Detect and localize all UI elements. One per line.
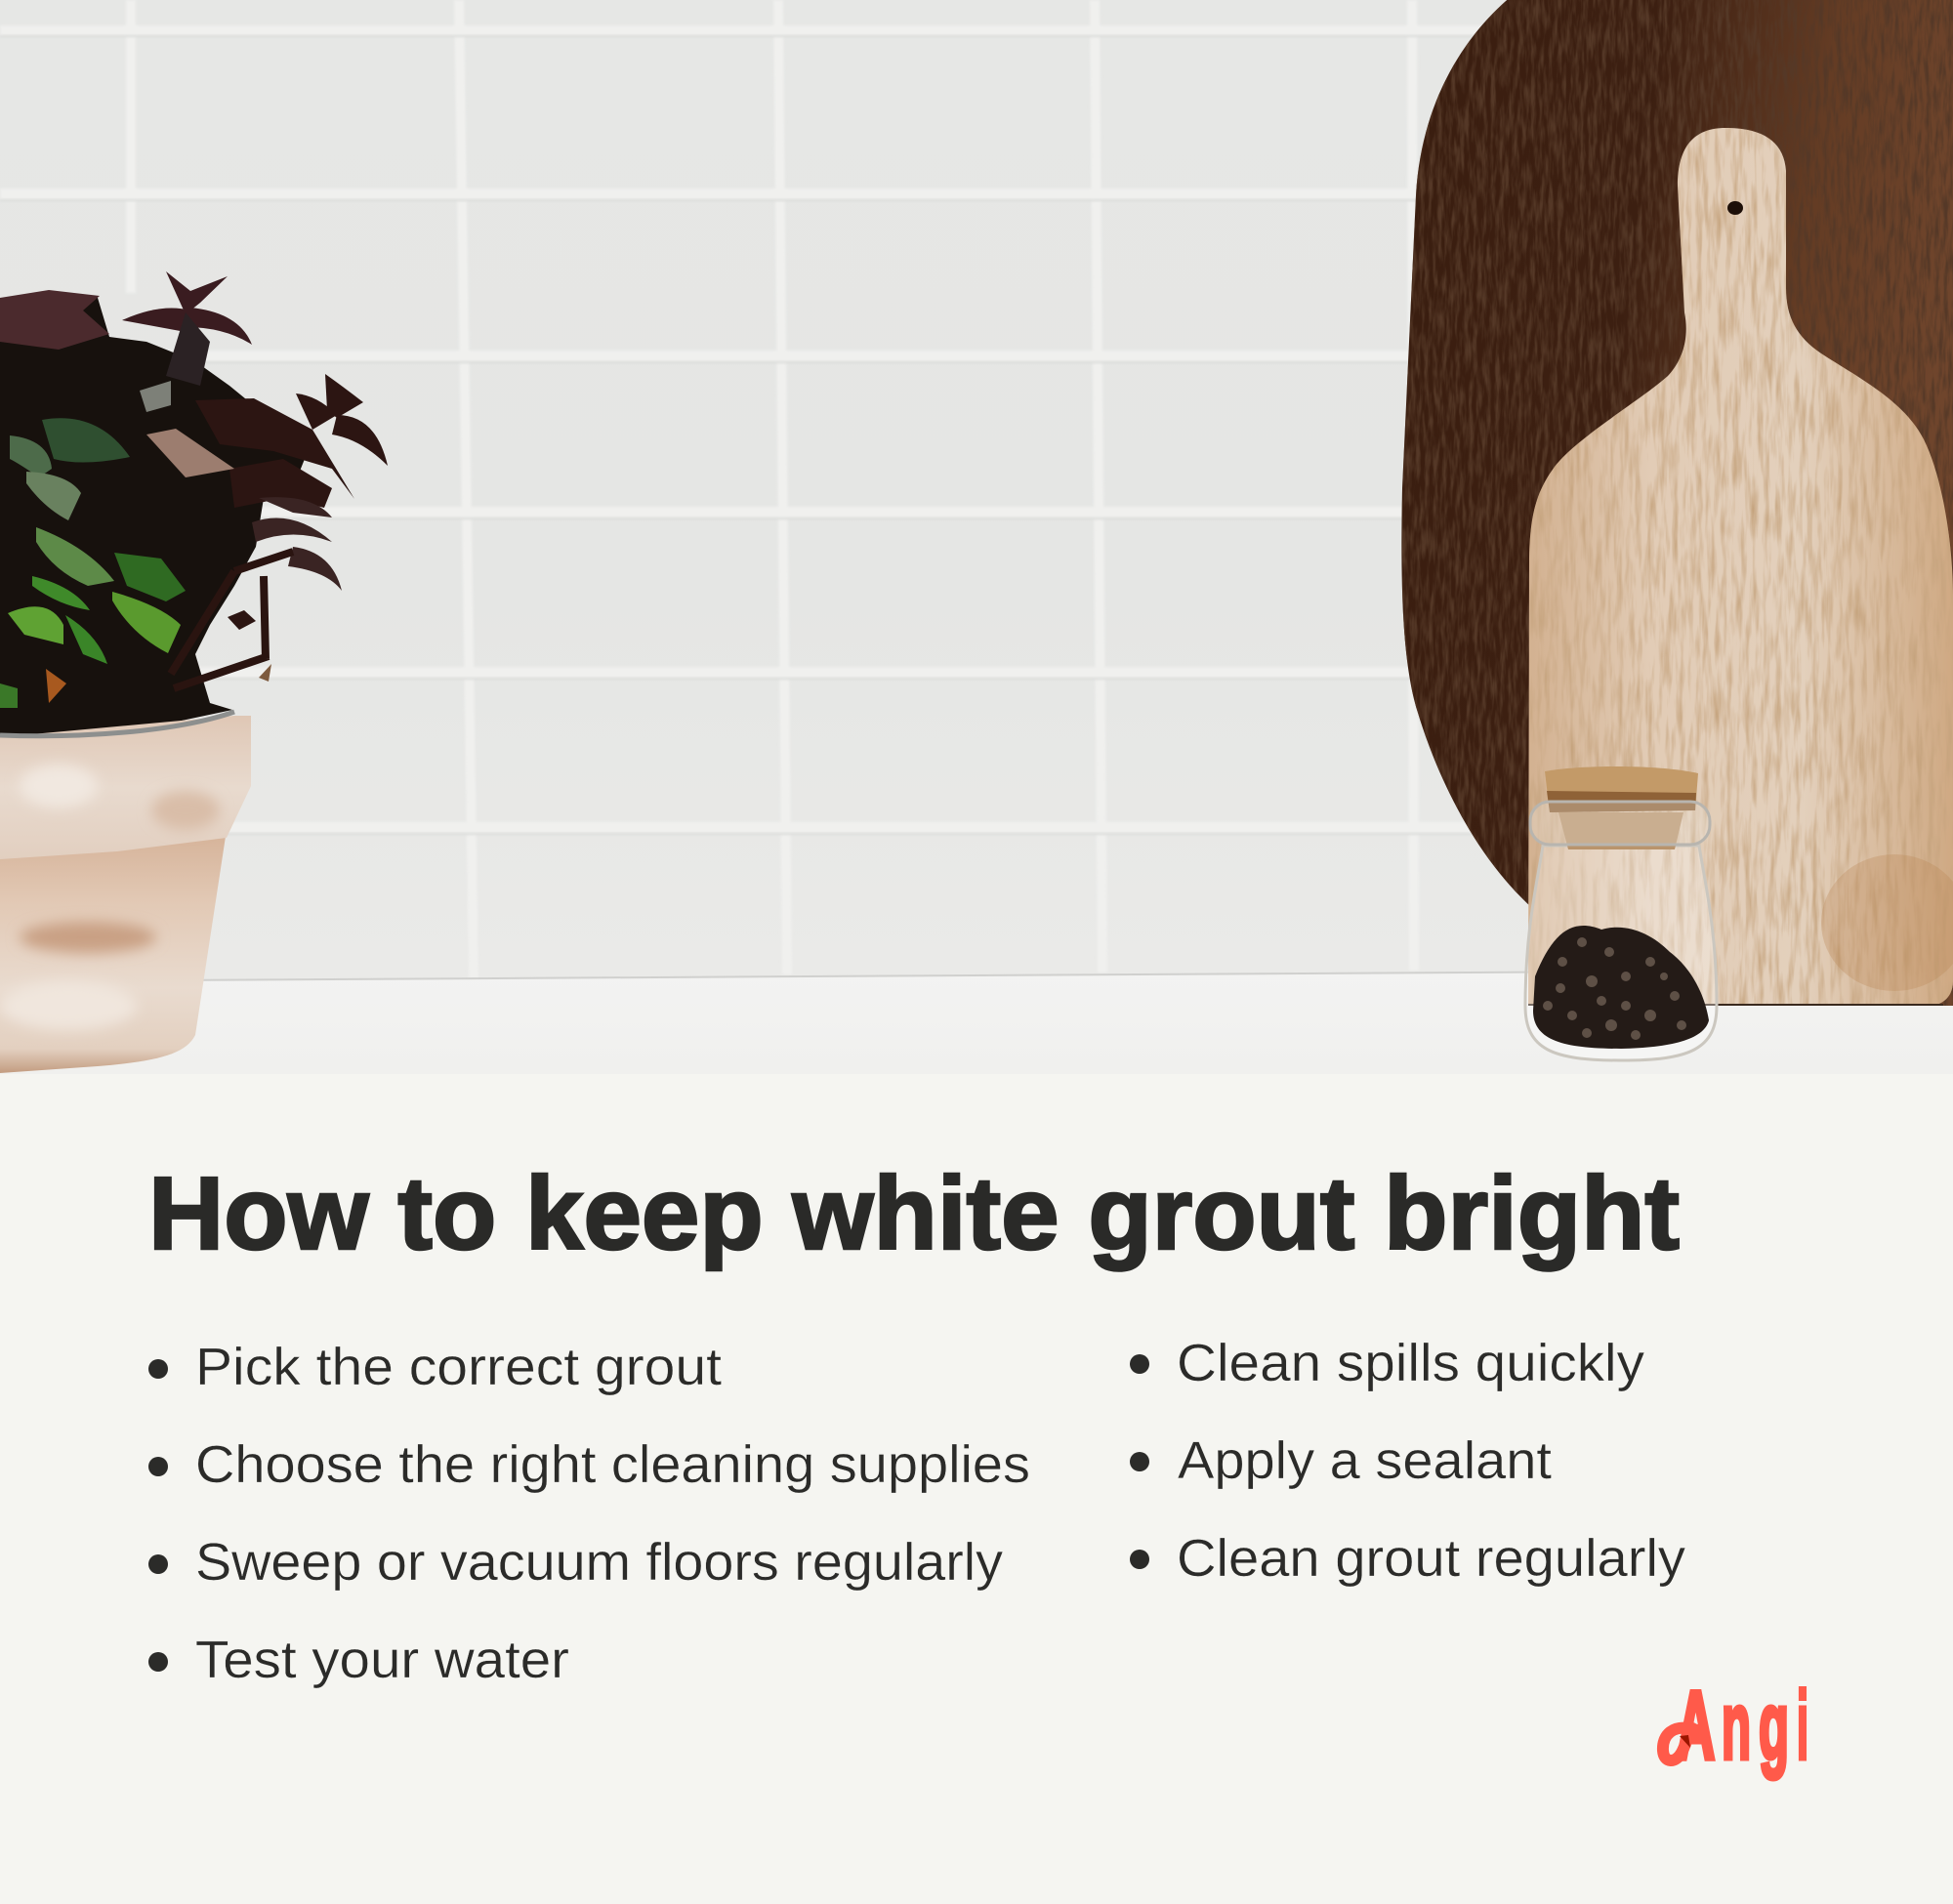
green leaves (42, 418, 130, 463)
photo: kitchen counter scene (0, 0, 1953, 1074)
plant foliage (0, 271, 388, 734)
glass jar with peppercorns (1525, 766, 1717, 1060)
dark wooden board (1396, 0, 1953, 1006)
tiled wall (0, 0, 1528, 978)
item: clean spills: Clean spills quickly (1177, 1334, 1644, 1392)
dark foliage mass (0, 293, 305, 734)
title: How to keep white grout bright (148, 1156, 1680, 1271)
purple leaf clusters and stems (0, 271, 388, 688)
light wooden cutting board (1523, 122, 1953, 1011)
item: cleaning supplies: Choose the right cleaning supplies (195, 1435, 1030, 1494)
logo: Angi (1663, 1672, 1808, 1779)
potted plant (0, 271, 388, 1073)
item: sweep or vacuum: Sweep or vacuum floors regularly (195, 1533, 1003, 1592)
infographic page: i (1797, 1672, 1808, 1779)
logo: Angi: n (1722, 1672, 1751, 1779)
item: test water: Test your water (195, 1631, 569, 1689)
item: clean grout: Clean grout regularly (1177, 1529, 1685, 1588)
terracotta pot (0, 712, 251, 1073)
item: pick grout: Pick the correct grout (195, 1338, 722, 1396)
logo: Angi: A (1677, 1672, 1715, 1779)
logo: Angi: g (1759, 1672, 1789, 1779)
bullet list: right column (1130, 1334, 1685, 1588)
item: apply sealant: Apply a sealant (1178, 1431, 1552, 1490)
bullet list: left column (148, 1338, 1030, 1689)
countertop (203, 971, 1528, 986)
